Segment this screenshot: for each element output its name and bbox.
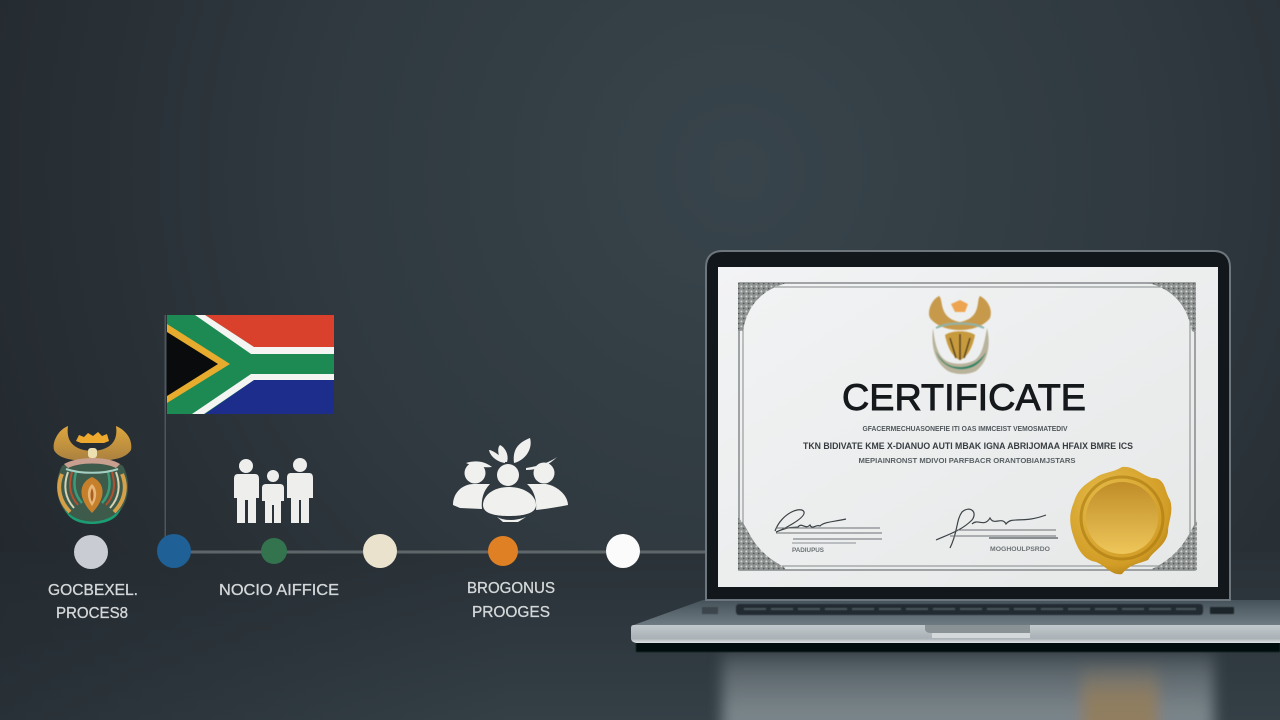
laptop reflection on table [722, 652, 1214, 720]
certificate line 2: TKN BIDIVATE KME X-DIANUO AUTI MBAK IGNA ABRIJOMAA HFAIX BMRE ICS [803, 441, 1133, 451]
laptop shadow [636, 642, 1280, 652]
certificate frame lines [739, 283, 1195, 570]
certificate emblem [929, 296, 991, 374]
certificate line 1: GFACERMECHUASONEFIE ITI OAS IMMCEIST VEMOSMATEDIV [862, 426, 1068, 433]
timeline connector [190, 550, 706, 554]
South African flag [167, 315, 334, 414]
background wall [0, 0, 1280, 553]
corner ornaments [738, 283, 1197, 570]
signature left [775, 510, 882, 543]
laptop base deck [631, 600, 1280, 626]
laptop front edge [631, 625, 1280, 643]
step 6: white marker [606, 534, 640, 568]
laptop lid [706, 251, 1230, 600]
trackpad notch [925, 625, 1030, 638]
flag pole [164, 315, 166, 537]
step 5: community icon, marker and label [453, 438, 568, 621]
certificate title: CERTIFICATE [842, 377, 1086, 418]
label: step 3: NOCIO AIFFICE [219, 582, 339, 599]
marker: green dot [261, 538, 287, 564]
step 1: coat of arms and marker [48, 426, 138, 622]
signature right [936, 509, 1058, 548]
signature right caption: MOGHOULPSRDO [990, 547, 1050, 553]
keyboard [702, 604, 1234, 615]
certificate line 3: MEPIAINRONST MDIVOI PARFBACR ORANTOBIAMJSTARS [858, 458, 1076, 465]
step 4: cream marker [363, 534, 397, 568]
step 3: people icon, marker and label [219, 458, 339, 599]
certificate document [718, 267, 1218, 587]
marker: orange dot [488, 536, 518, 566]
label: step 5: BROGONUS [467, 580, 555, 597]
laptop [631, 251, 1280, 652]
icon: coat of arms [54, 426, 131, 524]
signature left caption: PADIUPUS [792, 548, 824, 554]
marker: grey dot [74, 535, 108, 569]
label: step 1 second line: PROCES8 [56, 605, 128, 622]
step 2: blue marker [157, 534, 191, 568]
label: step 1: GOCBEXEL. [48, 582, 138, 599]
gold wax seal [1070, 467, 1171, 574]
table surface [0, 552, 1280, 720]
label: step 5 second line: PROOGES [472, 604, 550, 621]
flag with pole [164, 315, 334, 537]
icon: community group with leaves [453, 438, 568, 522]
icon: three people [234, 458, 313, 523]
